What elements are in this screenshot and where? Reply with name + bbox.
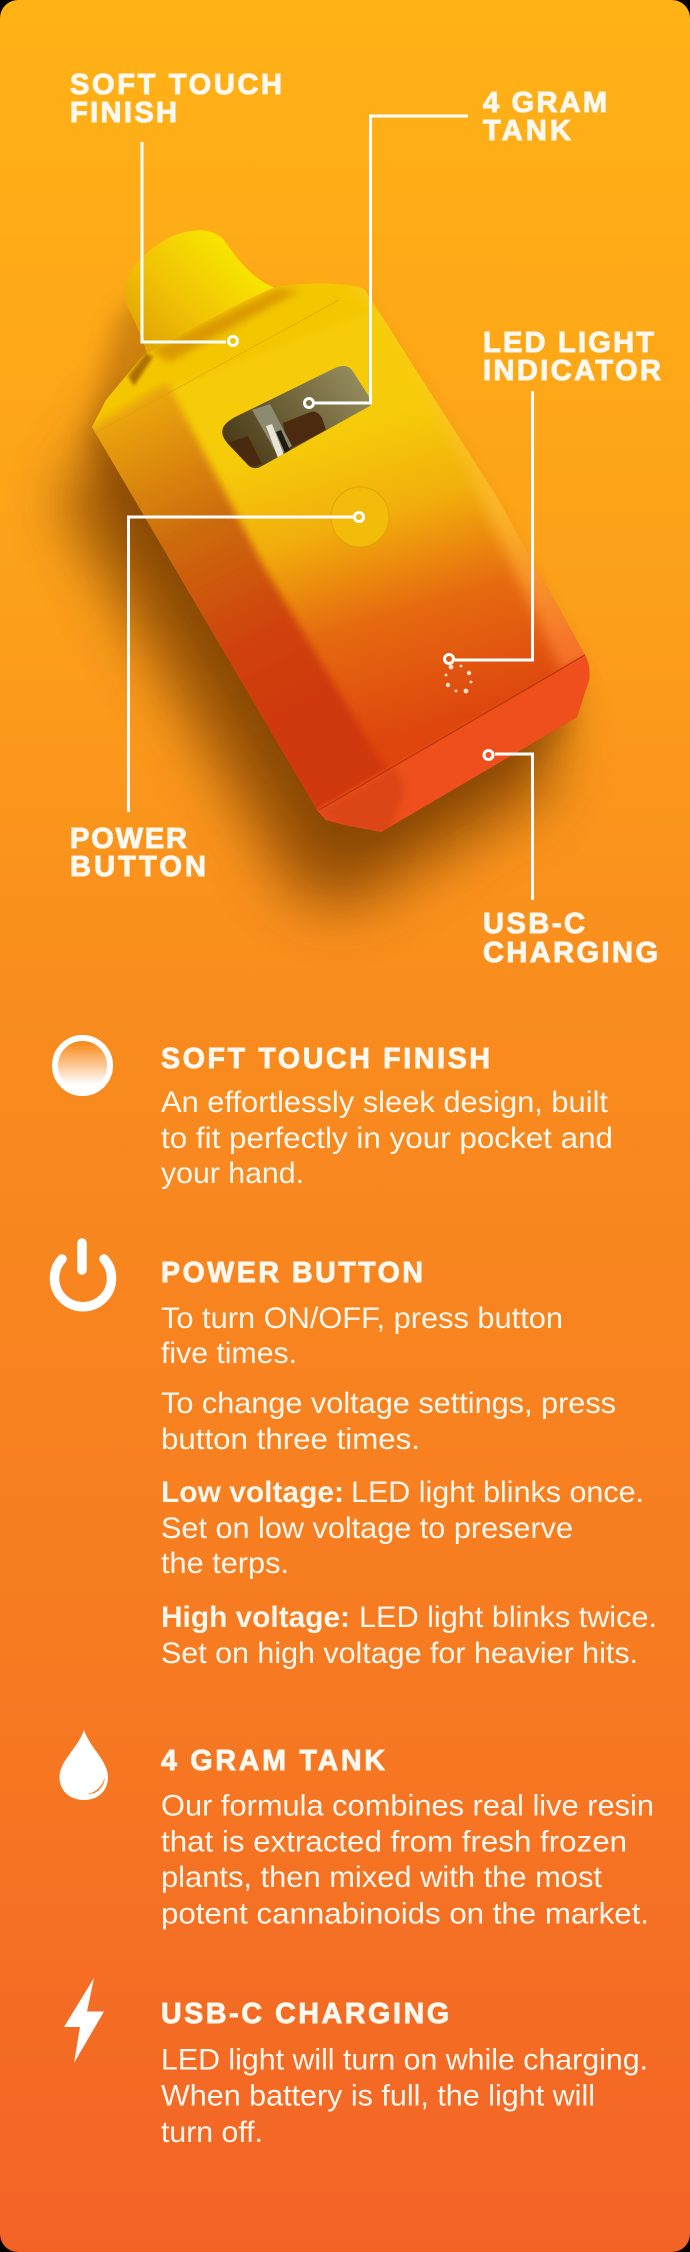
label: USB-C charging — [483, 908, 658, 969]
label: power button: POWER — [70, 823, 187, 855]
icon: soft touch circle — [55, 1038, 110, 1093]
icon: lightning bolt — [64, 1978, 104, 2063]
text: soft touch finish: your hand. — [161, 1157, 304, 1190]
text: power button instructions — [161, 1302, 616, 1456]
label: soft touch finish: SOFT TOUCH — [70, 69, 282, 101]
leader: USB-C charging — [484, 750, 532, 900]
leader: soft touch finish — [142, 142, 238, 346]
text: soft touch finish: to fit perfectly in your pocket and — [161, 1122, 613, 1155]
label: LED light indicator: LED LIGHT — [483, 327, 654, 359]
label: soft touch finish: FINISH — [70, 97, 177, 129]
label: LED light indicator: INDICATOR — [483, 355, 661, 387]
text: power button instructions: To turn ON/OFF, press button — [161, 1302, 563, 1335]
icon: drop — [60, 1730, 108, 1800]
text: power button instructions: button three times. — [161, 1423, 420, 1456]
text: low voltage: the terps. — [161, 1547, 289, 1580]
bottom seam — [319, 655, 585, 810]
text: USB-C charging — [161, 2044, 648, 2149]
text: power button instructions: five times. — [161, 1337, 297, 1370]
text: 4 gram tank: plants, then mixed with the most — [161, 1861, 603, 1894]
text: USB-C charging: turn off. — [161, 2116, 263, 2149]
text: soft touch finish: An effortlessly sleek design, built — [161, 1086, 609, 1119]
power button disc — [331, 487, 389, 547]
heading: power button: POWER BUTTON — [161, 1257, 423, 1289]
leader: power button — [128, 512, 364, 812]
label: power button — [70, 823, 206, 883]
leader: LED indicator — [444, 391, 532, 664]
label: USB-C charging: USB-C — [483, 908, 585, 940]
top seam — [95, 300, 339, 433]
device illustration — [70, 230, 610, 840]
text: power button instructions: To change voltage settings, press — [161, 1387, 616, 1420]
LED indicator dots — [445, 665, 472, 693]
text: 4 gram tank: Our formula combines real live resin — [161, 1790, 654, 1822]
leader: 4 gram tank — [304, 116, 468, 408]
text: high voltage: LED light blinks twice. — [359, 1601, 657, 1634]
label: 4 gram tank: TANK — [483, 115, 571, 147]
label: USB-C charging: CHARGING — [483, 937, 658, 969]
heading: soft touch finish: SOFT TOUCH FINISH — [161, 1043, 490, 1075]
text: 4 gram tank — [161, 1790, 654, 1930]
text: high voltage — [161, 1601, 657, 1670]
text: low voltage: Low voltage: — [161, 1476, 344, 1509]
text: USB-C charging: When battery is full, the light will — [161, 2080, 595, 2112]
label: 4 gram tank — [483, 87, 607, 147]
device mouthpiece — [125, 230, 277, 375]
label: LED light indicator — [483, 327, 661, 387]
device body — [92, 283, 590, 832]
text: high voltage: Set on high voltage for heavier hits. — [161, 1637, 638, 1670]
device shadow — [62, 258, 577, 907]
text: low voltage — [161, 1476, 644, 1580]
label: 4 gram tank: 4 GRAM — [483, 87, 607, 119]
text: low voltage: LED light blinks once. — [351, 1476, 644, 1509]
text: USB-C charging: LED light will turn on while charging. — [161, 2044, 648, 2076]
label: power button: BUTTON — [70, 851, 206, 883]
label: soft touch finish — [70, 69, 282, 129]
text: high voltage: High voltage: — [161, 1601, 350, 1634]
heading: 4 gram tank: 4 GRAM TANK — [161, 1745, 385, 1777]
text: soft touch finish — [161, 1086, 613, 1190]
heading: USB-C charging: USB-C CHARGING — [161, 1998, 449, 2030]
icon: power symbol — [55, 1243, 111, 1307]
text: 4 gram tank: that is extracted from fresh frozen — [161, 1826, 627, 1858]
tank window — [222, 366, 372, 468]
text: low voltage: Set on low voltage to preserve — [161, 1512, 573, 1545]
text: 4 gram tank: potent cannabinoids on the market. — [161, 1898, 649, 1930]
